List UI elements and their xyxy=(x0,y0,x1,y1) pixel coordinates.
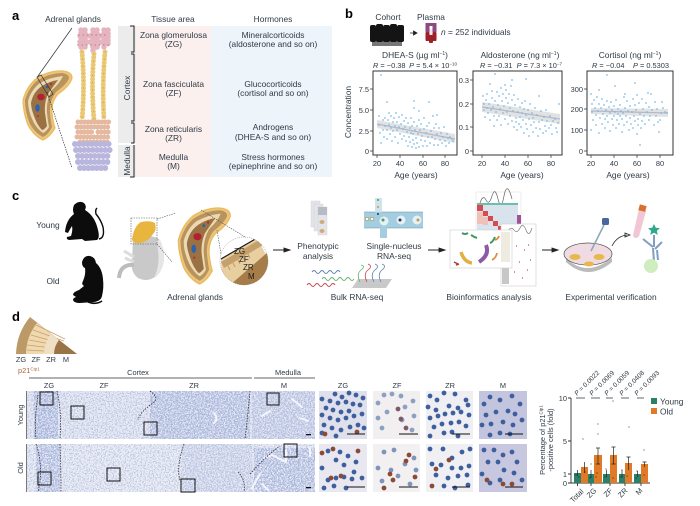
icon: adrenal gland with zoom: ZR xyxy=(243,263,254,272)
chart: Aldosterone: 80 xyxy=(547,159,555,168)
bar chart: p21-positive cells xyxy=(538,370,684,504)
row labels: Old xyxy=(16,462,25,474)
error bars xyxy=(578,447,646,478)
column: tissue area: Zona glomerulosa xyxy=(140,30,207,40)
chart: Aldosterone: 0.3 xyxy=(459,76,469,85)
y axis title xyxy=(538,405,555,475)
gray strip: medulla label: Medulla xyxy=(122,146,132,176)
chart: Aldosterone: P = 7.3 × 10 xyxy=(517,61,557,70)
chart: DHEA-S: −1 xyxy=(439,51,445,57)
UMAP sheet xyxy=(450,230,512,268)
icon: petri dish with pipette xyxy=(564,218,612,272)
chart: Aldosterone: −1 xyxy=(551,51,557,57)
chart: Aldosterone: −7 xyxy=(557,62,562,66)
young monkey: Young xyxy=(36,220,60,230)
chart: Aldosterone: Age (years) xyxy=(500,170,544,180)
significance values: P = 0.0059 xyxy=(603,370,631,397)
chart: Cortisol: Age (years) xyxy=(606,170,650,180)
column: tissue area: Zona fasciculata xyxy=(143,79,204,89)
plasma tube icon and label xyxy=(417,12,445,43)
zoom guide lines xyxy=(37,28,72,168)
icon: adrenal gland with zoom xyxy=(167,208,272,302)
plasma tube icon and label: Plasma xyxy=(417,12,445,22)
chart: Aldosterone xyxy=(459,50,562,180)
chart: DHEA-S: 0 xyxy=(365,147,369,156)
illustration: adrenal cell columns xyxy=(75,30,112,168)
chart: DHEA-S: 80 xyxy=(441,159,449,168)
column: hormones xyxy=(211,26,332,177)
icon: bioinformatics plots: Bioinformatics analysis xyxy=(446,292,532,302)
column: hormones: Androgens xyxy=(253,122,293,132)
curved arrow to tube xyxy=(612,233,630,246)
label: p21 Cip1: p21 xyxy=(18,366,30,375)
icon: adrenal gland cross-section xyxy=(23,71,72,140)
young bars xyxy=(574,473,641,483)
icon: cortex wedge diagram: ZR xyxy=(46,355,56,364)
micrograph zone labels: ZG xyxy=(338,381,348,390)
icon: adrenal gland with zoom: ZG xyxy=(234,247,245,256)
chart: Aldosterone: 60 xyxy=(524,159,532,168)
icon: antibody with star: Experimental verification xyxy=(565,292,657,302)
header: zones: ZG xyxy=(44,381,54,390)
legend: Old xyxy=(660,406,673,416)
micrographs: young xyxy=(319,391,527,439)
column: tissue area: (M) xyxy=(167,161,180,171)
chart: DHEA-S: 2.5 xyxy=(359,127,369,136)
column: hormones: (cortisol and so on) xyxy=(237,88,309,98)
x labels: M xyxy=(634,486,644,497)
chart: Cortisol: 80 xyxy=(656,159,664,168)
gray strip: cortex label xyxy=(118,26,136,143)
arrow: cohort to plasma xyxy=(410,31,417,35)
y axis title: -positive cells (fold) xyxy=(546,408,555,472)
x labels: Total xyxy=(568,487,586,504)
header: zones: ZR xyxy=(189,381,199,390)
arrow xyxy=(273,248,290,252)
significance values: P = 0.0408 xyxy=(618,370,646,397)
icon: single-nucleus droplet channel: RNA-seq xyxy=(377,251,411,261)
old bars xyxy=(581,455,648,483)
x labels xyxy=(568,486,644,504)
significance sheet xyxy=(501,224,536,286)
significance values: P = 0.0069 xyxy=(588,370,616,397)
icon: kidney with adrenal gland xyxy=(119,218,164,280)
icon: cortex wedge diagram: ZF xyxy=(31,355,41,364)
icon: adrenal gland with zoom: Adrenal glands xyxy=(167,292,223,302)
icon: phenotypic analysis slides: analysis xyxy=(303,251,333,261)
chart: DHEA-S: 40 xyxy=(396,159,404,168)
panel letter b: b xyxy=(345,6,353,21)
micrograph zone labels xyxy=(338,381,506,390)
label: p21 Cip1: Cip1 xyxy=(30,366,40,372)
histology: old section xyxy=(27,444,315,492)
icon: cortex wedge diagram: M xyxy=(63,355,69,364)
chart: DHEA-S: 20 xyxy=(373,159,381,168)
header row labels xyxy=(151,14,292,24)
panel a: adrenal zones table xyxy=(12,8,332,177)
row labels xyxy=(16,391,27,492)
icon: antibody with star xyxy=(565,224,662,302)
icon: cortex wedge diagram: ZG xyxy=(16,355,26,364)
chart: DHEA-S: R = −0.38 xyxy=(373,61,405,70)
chart: DHEA-S: P = 5.4 × 10 xyxy=(409,61,449,70)
chart: DHEA-S: 7.5 xyxy=(359,85,369,94)
axes: 1 xyxy=(563,470,567,479)
panel letter a: a xyxy=(12,8,20,23)
chart: Cortisol: −1 xyxy=(653,51,659,57)
chart: Cortisol: Cortisol (ng ml xyxy=(599,50,653,60)
data points xyxy=(576,401,644,478)
chart: Cortisol: ) xyxy=(658,50,661,60)
column: hormones: Mineralcorticoids xyxy=(242,30,304,40)
header row labels: Tissue area xyxy=(151,14,195,24)
chart: DHEA-S: Age (years) xyxy=(394,170,438,180)
icon: adrenal gland with zoom: M xyxy=(248,272,255,281)
chart: DHEA-S: 60 xyxy=(419,159,427,168)
chart: Cortisol: 40 xyxy=(610,159,618,168)
old monkey: Old xyxy=(46,276,60,286)
chart: DHEA-S: DHEA-S (µg ml xyxy=(382,50,439,60)
chart: DHEA-S: ) xyxy=(445,50,448,60)
column: tissue area xyxy=(136,26,211,177)
icon: single-nucleus droplet channel: Single-nucleus xyxy=(367,241,421,251)
sample size: n = 252 individuals xyxy=(441,27,511,37)
icon: bulk RNA waves xyxy=(307,270,354,286)
chart: Cortisol: R = −0.04 xyxy=(592,61,624,70)
chart: Aldosterone: 0.1 xyxy=(459,123,469,132)
panel c: experimental workflow xyxy=(12,188,662,303)
chart: Aldosterone: 0 xyxy=(465,147,469,156)
chart: DHEA-S: −10 xyxy=(449,62,457,66)
cohort icon and label xyxy=(370,12,404,46)
chart: Aldosterone: 40 xyxy=(501,159,509,168)
legend xyxy=(651,396,684,416)
heading: adrenal glands: Adrenal glands xyxy=(45,14,101,24)
icon: test tube xyxy=(633,204,647,238)
header: cortex and medulla xyxy=(29,368,315,378)
chart: Cortisol: 100 xyxy=(571,126,583,135)
chart: DHEA-S: 5.0 xyxy=(359,106,369,115)
column: hormones: (DHEA-S and so on) xyxy=(235,132,311,142)
header: cortex and medulla: Cortex xyxy=(127,368,149,377)
chart: Aldosterone: ) xyxy=(557,50,560,60)
icon: phenotypic analysis slides xyxy=(297,201,339,261)
micrograph zone labels: ZF xyxy=(392,381,402,390)
chart: Cortisol: P = 0.5303 xyxy=(633,61,669,70)
significance values xyxy=(573,370,661,398)
chart: Aldosterone: 0.2 xyxy=(459,100,469,109)
axes: 5 xyxy=(563,437,567,446)
header: zones xyxy=(44,381,287,390)
chart: Cortisol: 300 xyxy=(571,85,583,94)
header: cortex and medulla: Medulla xyxy=(275,368,302,377)
column: hormones: (epinephrine and so on) xyxy=(229,161,317,171)
old monkey xyxy=(46,256,103,303)
icon: cortex wedge diagram xyxy=(16,317,77,364)
icon: bioinformatics plots xyxy=(446,189,536,302)
icon: phenotypic analysis slides: Phenotypic xyxy=(297,241,339,251)
panel b: plasma hormone scatter plots xyxy=(343,6,673,180)
chart: Cortisol: 200 xyxy=(571,105,583,114)
header: zones: M xyxy=(281,381,287,390)
column: tissue area: (ZG) xyxy=(165,39,182,49)
significance values: P = 0.0093 xyxy=(633,370,661,397)
significance values: P = 0.0022 xyxy=(573,370,601,397)
axes: 0 xyxy=(563,479,567,488)
icon: RNA strands on plate: Bulk RNA-seq xyxy=(331,292,384,302)
axes xyxy=(559,394,650,488)
panel d: p21 histology and quantification xyxy=(12,309,684,504)
chart: Cortisol xyxy=(571,50,673,180)
heatmap sheet xyxy=(476,189,521,262)
chart: Aldosterone: 20 xyxy=(478,159,486,168)
column: hormones: (aldosterone and so on) xyxy=(229,39,317,49)
column: tissue area: Zona reticularis xyxy=(145,124,202,134)
zone brackets xyxy=(130,26,134,177)
legend: Young xyxy=(660,396,684,406)
row labels: Young xyxy=(16,405,25,425)
y-axis title: concentration: Concentration xyxy=(343,86,353,138)
header row labels: Hormones xyxy=(254,14,292,24)
x labels: ZF xyxy=(602,486,615,499)
arrow xyxy=(428,248,445,252)
y axis title: Cip1 xyxy=(538,405,544,414)
young monkey xyxy=(36,202,104,241)
chart: Aldosterone: Aldosterone (ng ml xyxy=(481,50,551,60)
y axis title: Percentage of p21 xyxy=(538,414,547,475)
gray strip: medulla label xyxy=(118,145,136,177)
histology: young section xyxy=(27,391,315,439)
zoom guide lines: kidney to gland xyxy=(157,213,176,262)
x labels: ZR xyxy=(616,486,629,499)
cohort icon and label: Cohort xyxy=(375,12,401,22)
column: hormones: Glucocorticoids xyxy=(244,79,302,89)
column: tissue area: (ZR) xyxy=(165,133,182,143)
axes: 10 xyxy=(559,394,567,403)
column: tissue area: Medulla xyxy=(159,152,188,162)
panel letter d: d xyxy=(12,309,20,324)
header: zones: ZF xyxy=(99,381,109,390)
column: tissue area: (ZF) xyxy=(166,88,182,98)
micrograph zone labels: ZR xyxy=(445,381,455,390)
icon: RNA strands on plate xyxy=(331,264,392,302)
gray strip: cortex label: Cortex xyxy=(122,75,132,100)
icon: adrenal gland with zoom: ZF xyxy=(239,255,249,264)
micrograph zone labels: M xyxy=(500,381,506,390)
chart: Cortisol: 20 xyxy=(587,159,595,168)
chart: DHEA-S xyxy=(359,50,457,180)
micrographs: old xyxy=(319,444,527,492)
chart: Cortisol: 60 xyxy=(633,159,641,168)
chart: Aldosterone: R = −0.31 xyxy=(480,61,512,70)
panel letter c: c xyxy=(12,188,19,203)
chart: Cortisol: 0 xyxy=(579,147,583,156)
icon: single-nucleus droplet channel xyxy=(364,198,423,261)
column: hormones: Stress hormones xyxy=(241,152,305,162)
arrow xyxy=(542,248,558,252)
x labels: ZG xyxy=(585,486,599,500)
